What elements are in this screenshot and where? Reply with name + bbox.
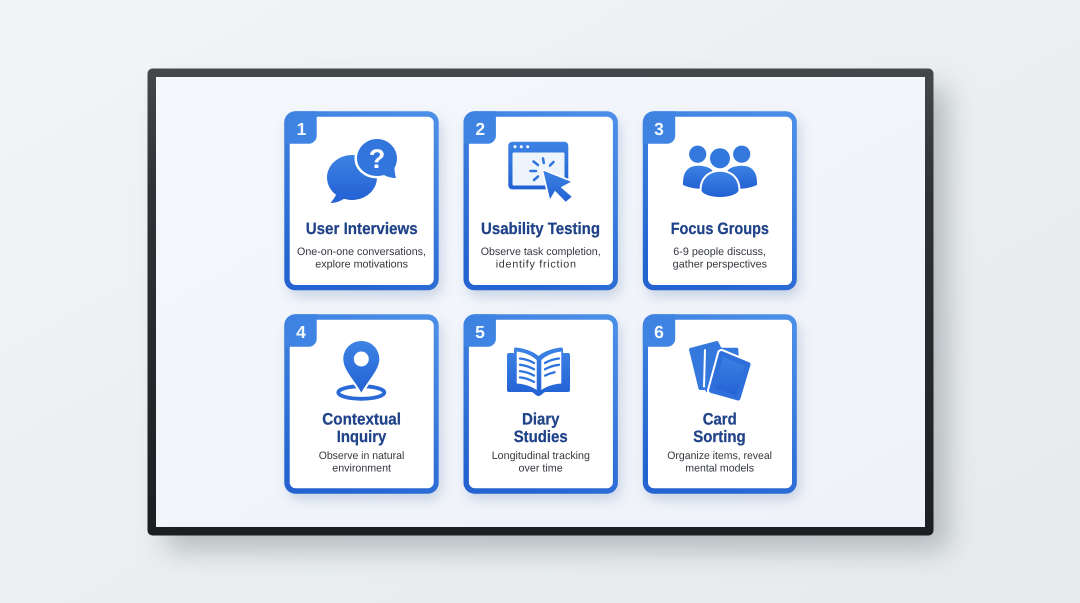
badge 3: 3 <box>654 119 664 139</box>
description: 6-9 people discuss, <box>673 246 766 258</box>
description <box>492 450 590 475</box>
title <box>322 410 401 446</box>
title: Focus Groups <box>671 220 769 238</box>
icon: speech bubbles <box>327 139 397 203</box>
title: Diary <box>522 410 560 428</box>
description: Organize items, reveal <box>667 450 772 462</box>
monitor <box>148 68 948 550</box>
badge 1 <box>284 111 317 144</box>
description: Observe task completion, <box>481 246 601 258</box>
panel: card 1 user interviews <box>284 111 442 297</box>
description: Observe in natural <box>319 450 404 462</box>
badge 2: 2 <box>475 119 485 139</box>
icon: open book <box>507 347 570 396</box>
badge 5: 5 <box>475 322 485 342</box>
icon: stacked cards <box>690 342 748 398</box>
description: One-on-one conversations, <box>297 246 426 258</box>
badge 4: 4 <box>296 322 306 342</box>
badge 6: 6 <box>654 322 664 342</box>
badge 3 <box>643 111 675 144</box>
description <box>667 450 772 475</box>
title: Sorting <box>693 428 746 446</box>
description: over time <box>518 463 563 475</box>
icon: location pin <box>338 341 384 399</box>
description: environment <box>332 463 391 475</box>
description <box>673 246 768 271</box>
title <box>514 410 568 446</box>
badge 6 <box>643 314 675 347</box>
panel: card 6 card sorting <box>643 314 800 500</box>
badge 2 <box>464 111 496 144</box>
description <box>319 450 404 475</box>
description: Longitudinal tracking <box>492 450 590 462</box>
panel: card 2 usability testing <box>464 111 621 297</box>
title: Studies <box>514 428 568 446</box>
title <box>693 410 746 446</box>
badge 1: 1 <box>297 119 307 139</box>
title: Inquiry <box>337 428 387 446</box>
description: explore motivations <box>315 259 409 271</box>
title: Usability Testing <box>481 220 600 238</box>
description: gather perspectives <box>673 259 768 271</box>
panel: card 5 diary studies <box>464 314 621 500</box>
description <box>297 246 426 271</box>
description <box>481 246 601 271</box>
icon: group of people <box>683 146 757 197</box>
title: Contextual <box>322 410 401 428</box>
badge 4 <box>284 314 317 347</box>
title: Card <box>703 410 737 428</box>
description: mental models <box>685 463 755 475</box>
icon: speech bubbles: ? <box>369 144 385 174</box>
panel: card 4 contextual inquiry <box>284 314 442 500</box>
title: User Interviews <box>306 220 418 238</box>
icon: browser window with cursor <box>508 142 572 202</box>
description: identify friction <box>496 259 576 271</box>
panel: card 3 focus groups <box>643 111 800 297</box>
badge 5 <box>464 314 496 347</box>
